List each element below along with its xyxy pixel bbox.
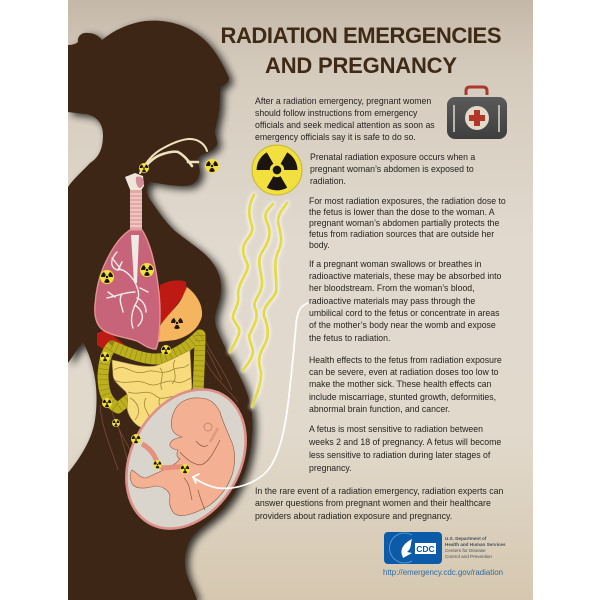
intro text: After a radiation emergency, pregnant women [255, 96, 431, 106]
paragraph: radioactive materials: If a pregnant woman swallows or breathes in [309, 259, 482, 269]
wavy radiation lines [230, 195, 287, 407]
icons: radiation in cord [131, 434, 190, 475]
paragraph: sensitivity by week: pregnancy. [309, 463, 352, 473]
stomach [158, 287, 202, 342]
CDC logo [384, 532, 442, 564]
paragraph: dose to the fetus: pregnant woman’s abdomen partially protects the [309, 218, 499, 228]
CDC logo: CDC [416, 544, 435, 554]
airway from nose and mouth [140, 139, 207, 173]
paper background [68, 0, 533, 600]
paragraph: health effects: can be severe, even at radiation doses too low to [309, 367, 499, 377]
paragraph: prenatal exposure: Prenatal radiation exposure occurs when a [310, 152, 475, 162]
icons: radiation in lungs [100, 263, 154, 285]
paragraph: dose to the fetus: body. [309, 240, 330, 250]
icon: radiation at throat [139, 163, 149, 174]
umbilical cord [142, 444, 184, 468]
woman silhouette [68, 21, 253, 600]
paragraph: sensitivity by week: A fetus is most sensitive to radiation between [309, 424, 483, 434]
paragraph: radioactive materials: her bloodstream. From the woman’s blood, [309, 283, 475, 293]
fetus [130, 398, 235, 516]
paragraph: health effects: Health effects to the fetus from radiation exposure [309, 355, 502, 365]
agency text: Health and Human Services [445, 542, 506, 547]
paragraph: radiation experts: answer questions from pregnant women and their healthcare [255, 498, 491, 508]
agency text: U.S. Department of [445, 536, 487, 541]
paragraph: dose to the fetus: the fetus is lower than the dose to the woman. A [309, 207, 495, 217]
paragraph: radioactive materials: radioactive materials may pass through the [309, 296, 475, 306]
veins in lower abdomen [100, 340, 238, 470]
intro text: officials and seek medical attention as soon as [255, 120, 435, 130]
paragraph: health effects: abnormal brain function, and cancer. [309, 404, 450, 414]
paragraph: radioactive materials: radioactive materials, these may be absorbed into [309, 271, 502, 281]
uterus [102, 368, 270, 550]
intro text: should follow instructions from emergency [255, 108, 418, 118]
agency text: Centers for Disease [445, 548, 486, 553]
paragraph: prenatal exposure: radiation. [310, 176, 346, 186]
small intestine [112, 350, 192, 427]
icon: radiation near mouth [205, 159, 219, 174]
icon: radiation in stomach [170, 318, 183, 331]
large intestine [103, 335, 200, 408]
paragraph: radiation experts: In the rare event of a radiation emergency, radiation experts can [255, 486, 503, 496]
lungs [95, 230, 160, 349]
agency text: Control and Prevention [445, 554, 492, 559]
website link: http://emergency.cdc.gov/radiation [383, 568, 503, 577]
icon: large radiation symbol [252, 145, 302, 196]
paragraph: radioactive materials: of the mother’s body near the womb and expose [309, 320, 496, 330]
arrow to fetus [193, 303, 308, 488]
title: RADIATION EMERGENCIES [220, 23, 502, 48]
paragraph: sensitivity by week: less sensitive to radiation during later stages of [309, 450, 491, 460]
larynx and trachea [125, 173, 144, 235]
icon: medical bag [447, 87, 507, 139]
title: AND PREGNANCY [265, 53, 457, 78]
paragraph: sensitivity by week: weeks 2 and 18 of pregnancy. A fetus will become [308, 437, 501, 447]
paragraph: dose to the fetus: fetus from radiation sources that are outside her [309, 229, 494, 239]
liver [97, 280, 187, 352]
intro text: emergency officials say it is safe to do so. [255, 132, 416, 142]
paragraph: radioactive materials: the fetus to radiation. [309, 333, 390, 343]
paragraph: health effects: make the mother sick. These health effects can [309, 379, 492, 389]
paragraph: health effects: include miscarriage, stunted growth, deformities, [309, 392, 496, 402]
paragraph: prenatal exposure: pregnant woman’s abdomen is exposed to [310, 164, 474, 174]
paragraph: radioactive materials: umbilical cord to the fetus or concentrate in areas [309, 308, 500, 318]
paragraph: radiation experts: providers about radiation exposure and pregnancy. [255, 511, 452, 521]
paragraph: dose to the fetus: For most radiation exposures, the radiation dose to [309, 196, 506, 206]
icons: radiation in the colon and veins [100, 345, 171, 427]
